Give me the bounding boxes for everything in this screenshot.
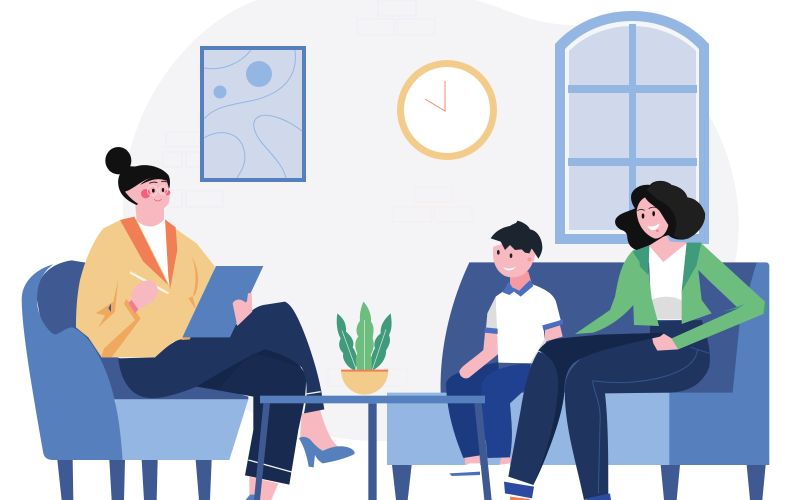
- plant and coffee table: [254, 302, 492, 500]
- counsellor back leg: [197, 348, 306, 485]
- boy shoes: [465, 454, 511, 466]
- plant right leaf: [371, 313, 392, 371]
- mother top: [648, 245, 687, 320]
- window: [555, 11, 709, 244]
- mother jacket: [575, 245, 659, 334]
- boy shirt: [486, 297, 498, 329]
- sofa: [387, 262, 769, 500]
- counsellor pen: [130, 272, 168, 293]
- mother jeans seams: [593, 347, 709, 493]
- brick outlines: [163, 0, 435, 207]
- counsellor jacket: [76, 219, 215, 357]
- counsellor: [96, 217, 355, 500]
- boy neck and head: [510, 270, 532, 294]
- mother neck: [648, 233, 687, 262]
- armchair seat: [115, 399, 248, 460]
- mother thigh shadow: [533, 333, 665, 485]
- table legs: [254, 403, 492, 500]
- table top: [260, 396, 485, 403]
- armchair back: [36, 260, 113, 398]
- mother head: [615, 181, 705, 262]
- counsellor heel shoe: [299, 437, 355, 467]
- mother face: [637, 197, 668, 239]
- counsellor lower leg and foot: [249, 477, 278, 500]
- boy trousers: [446, 362, 500, 458]
- boy: [446, 221, 563, 476]
- sofa seat: [387, 393, 670, 465]
- plant centre leaf: [355, 302, 374, 371]
- mother upper body: [565, 243, 767, 500]
- mother front leg and hips: [565, 320, 710, 500]
- armchair arm: [22, 264, 123, 460]
- wall clock: [397, 60, 497, 160]
- counsellor head: [105, 147, 170, 226]
- counsellor face: [125, 177, 170, 210]
- mother rear leg: [504, 352, 564, 500]
- counsellor sleeve fold: [96, 278, 118, 327]
- counsellor shirt and lapels: [136, 217, 171, 287]
- sofa legs: [392, 465, 766, 500]
- plant pot: [341, 370, 388, 395]
- clipboard: [182, 266, 263, 337]
- picture frame: [202, 48, 304, 180]
- mother hair: [615, 181, 705, 250]
- boy arms: [459, 333, 498, 378]
- boy collar: [503, 280, 533, 297]
- counsellor hair bun: [105, 147, 131, 174]
- armchair seat base: [98, 350, 248, 399]
- mother hand: [652, 333, 678, 351]
- sofa back: [441, 262, 758, 393]
- counsellor neck: [135, 202, 164, 226]
- counsellor writing hand: [132, 280, 158, 309]
- sofa arm: [669, 262, 769, 465]
- armchair legs: [57, 460, 212, 500]
- mother: [504, 181, 767, 500]
- counsellor front leg: [118, 302, 324, 413]
- plant left leaf: [337, 313, 357, 371]
- counsellor holding hand: [233, 293, 252, 326]
- counsellor sleeve cuff: [101, 299, 141, 357]
- counsellor hair: [118, 165, 170, 205]
- armchair: [22, 219, 248, 500]
- background blob: [123, 0, 739, 441]
